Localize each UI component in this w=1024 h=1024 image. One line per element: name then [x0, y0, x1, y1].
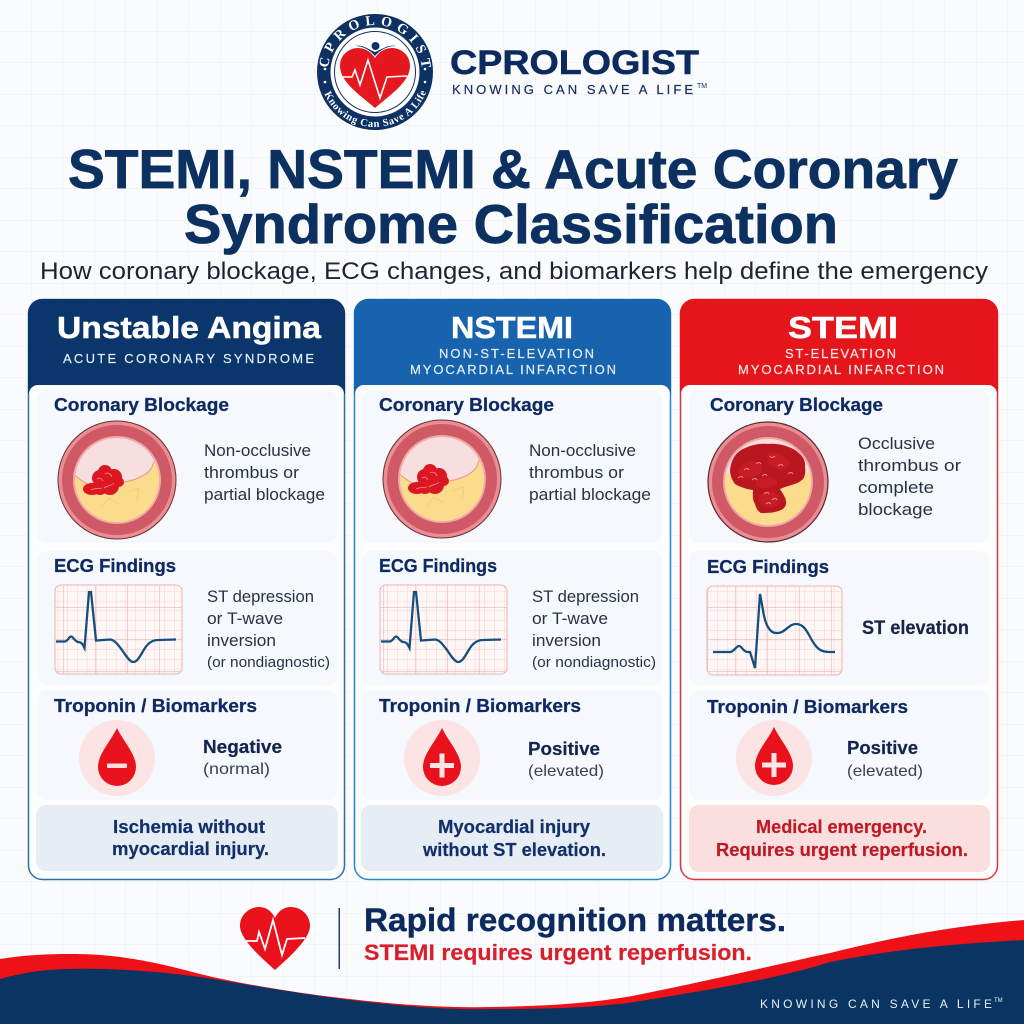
icon: occluded artery	[708, 422, 828, 542]
ecg text: ST depression	[532, 587, 639, 606]
title	[68, 138, 958, 255]
icon: heart with ecg	[240, 907, 310, 970]
subtitle: How coronary blockage, ECG changes, and biomarkers help define the emergency	[40, 258, 988, 285]
brand name	[450, 44, 707, 97]
ecg text: inversion	[532, 631, 601, 650]
icon: partially blocked artery	[383, 420, 501, 538]
header: stemi	[680, 299, 998, 394]
section: coronary blockage: Coronary Blockage	[379, 395, 554, 415]
ecg text	[532, 587, 656, 671]
ecg text: (or nondiagnostic)	[532, 654, 656, 671]
ecg text	[207, 587, 330, 671]
blockage text: partial blockage	[204, 485, 325, 504]
icon: blood drop positive	[736, 720, 812, 796]
header: stemi: MYOCARDIAL INFARCTION	[738, 362, 944, 377]
troponin result: (normal)	[203, 761, 270, 778]
troponin result: Negative	[203, 737, 282, 757]
callout: Ischemia without	[113, 817, 265, 837]
troponin result	[847, 738, 923, 780]
section: troponin	[689, 690, 989, 800]
ecg text: inversion	[207, 631, 276, 650]
blockage text	[204, 441, 325, 504]
troponin result	[528, 739, 604, 780]
brand name: TM	[697, 83, 707, 90]
ecg text: ST elevation	[862, 618, 969, 639]
blockage text: thrombus or	[858, 456, 961, 475]
blockage text: complete	[858, 478, 934, 497]
callout	[361, 805, 663, 871]
header: unstable angina	[28, 299, 345, 394]
footer message	[364, 902, 786, 965]
divider	[338, 908, 340, 969]
footer message: STEMI requires urgent reperfusion.	[364, 940, 752, 965]
section: ecg findings	[362, 551, 662, 685]
logo badge: CPROLOGIST	[320, 16, 432, 68]
chart: ecg st depression	[55, 585, 182, 674]
icon: blood drop positive	[404, 720, 480, 796]
logo badge	[317, 14, 433, 130]
icon: blood drop negative	[79, 720, 155, 796]
header: nstemi: MYOCARDIAL INFARCTION	[410, 362, 616, 377]
section: ecg findings: ECG Findings	[707, 557, 829, 577]
troponin result: (elevated)	[847, 763, 923, 780]
section: coronary blockage: Coronary Blockage	[54, 395, 229, 415]
section: ecg findings	[689, 551, 989, 685]
troponin result: (elevated)	[528, 763, 604, 780]
footer message: Rapid recognition matters.	[364, 902, 786, 938]
blockage text	[529, 441, 651, 504]
title: STEMI, NSTEMI & Acute Coronary	[68, 138, 958, 200]
troponin result: Positive	[528, 739, 600, 759]
section: troponin: Troponin / Biomarkers	[379, 696, 581, 716]
blockage text: thrombus or	[529, 463, 624, 482]
section: coronary blockage	[54, 397, 324, 540]
section: ecg findings: ECG Findings	[379, 556, 497, 576]
header: nstemi	[354, 299, 671, 394]
callout: without ST elevation.	[422, 840, 606, 860]
troponin result	[203, 737, 282, 778]
ecg text: or T-wave	[207, 609, 283, 628]
title: Syndrome Classification	[184, 193, 838, 255]
section: coronary blockage: Coronary Blockage	[710, 395, 883, 415]
icon: partially blocked artery	[58, 421, 176, 539]
brand name: CPROLOGIST	[450, 44, 699, 82]
ecg text: or T-wave	[532, 609, 608, 628]
blockage text: Non-occlusive	[529, 441, 636, 460]
callout	[36, 805, 338, 871]
section: troponin: Troponin / Biomarkers	[707, 697, 908, 717]
blockage text: partial blockage	[529, 485, 651, 504]
blockage text	[858, 434, 961, 519]
section: ecg findings	[37, 551, 337, 685]
blockage text: blockage	[858, 500, 933, 519]
section: troponin	[362, 690, 662, 800]
brand name: KNOWING CAN SAVE A LIFE	[452, 82, 693, 97]
panel: stemi	[680, 299, 998, 880]
callout: Myocardial injury	[438, 817, 590, 837]
section: coronary blockage	[380, 397, 650, 538]
callout: Medical emergency.	[756, 817, 927, 837]
section: troponin: Troponin / Biomarkers	[54, 696, 257, 716]
footer wave	[0, 920, 1024, 1024]
logo badge: Knowing Can Save A Life	[324, 90, 426, 127]
blockage text: thrombus or	[204, 463, 299, 482]
header: unstable angina: Unstable Angina	[57, 310, 322, 345]
footer tagline: TM	[994, 998, 1003, 1004]
blockage text: Non-occlusive	[204, 441, 311, 460]
blockage text: Occlusive	[858, 434, 935, 453]
footer tagline: KNOWING CAN SAVE A LIFE	[760, 997, 992, 1011]
header: stemi: ST-ELEVATION	[785, 346, 896, 361]
ecg text: (or nondiagnostic)	[207, 654, 330, 671]
chart: ecg st elevation	[707, 586, 842, 675]
ecg text: ST depression	[207, 587, 314, 606]
header: nstemi: NSTEMI	[451, 310, 573, 345]
header: nstemi: NON-ST-ELEVATION	[439, 346, 594, 361]
section: ecg findings: ECG Findings	[54, 556, 176, 576]
header: unstable angina: ACUTE CORONARY SYNDROME	[63, 351, 314, 366]
panel: unstable angina	[28, 299, 345, 880]
section: troponin	[37, 690, 337, 800]
callout: Requires urgent reperfusion.	[716, 840, 968, 860]
callout	[689, 805, 990, 872]
header: stemi: STEMI	[788, 310, 898, 345]
callout: myocardial injury.	[112, 839, 269, 859]
chart: ecg st depression	[380, 585, 507, 674]
section: coronary blockage	[689, 390, 989, 543]
panel: nstemi	[354, 299, 671, 880]
troponin result: Positive	[847, 738, 918, 758]
